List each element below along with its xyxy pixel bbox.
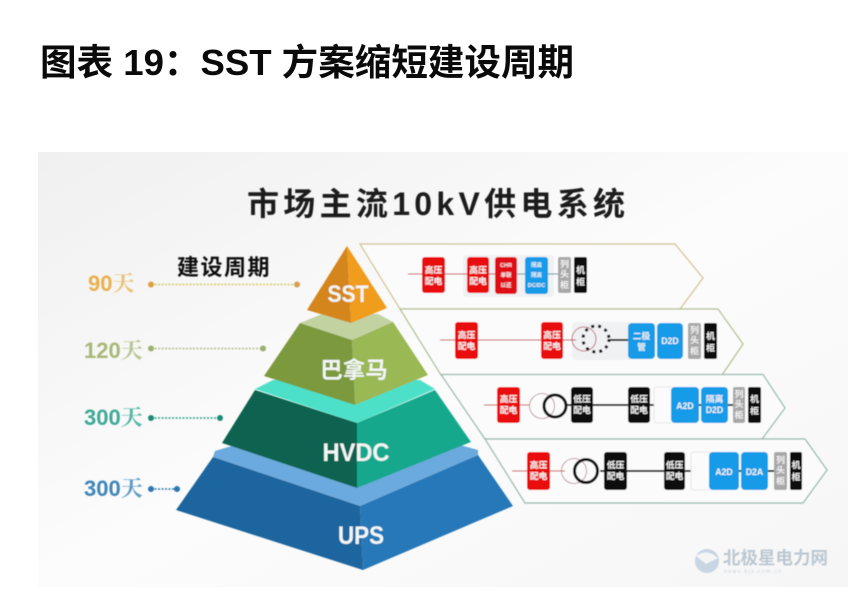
power chain: Panama: 高压 [543, 329, 561, 340]
pyramid tier: UPS [176, 445, 513, 570]
power chain: Panama: 配电 [543, 340, 561, 351]
title: 图表 19：SST 方案缩短建设周期 [40, 42, 574, 83]
watermark: news.bjx.com.cn [724, 569, 783, 575]
pyramid tier: SST [307, 246, 387, 323]
power chain: UPS: 低压 [607, 459, 624, 470]
power chain: UPS: 配电 [607, 470, 624, 481]
chevron outline row 4 [485, 439, 827, 503]
chevron outline row 2 [400, 309, 743, 375]
pyramid tier: UPS: UPS [338, 522, 384, 550]
power chain: Panama: 配电 [458, 340, 475, 351]
power chain: SST: CHR [500, 263, 512, 269]
power chain: HVDC: 机 [750, 393, 759, 404]
panel heading: 市场主流10kV供电系统 [247, 186, 629, 222]
power chain: Panama: 柜 [690, 345, 699, 356]
power chain: SST [408, 255, 587, 297]
timeline row: 90 days [88, 271, 300, 296]
power chain: HVDC: D2D [706, 405, 723, 415]
power chain: SST: 高压 [425, 264, 442, 275]
power chain: SST: 柜 [576, 276, 585, 287]
power chain: HVDC: 配电 [500, 404, 517, 415]
power chain: HVDC: 柜 [735, 409, 744, 420]
power chain: SST: 柜 [560, 279, 569, 290]
power chain: SST: 配电 [469, 275, 487, 286]
timeline row: 90 days: 90天 [88, 271, 134, 296]
power chain: UPS: 柜 [792, 471, 801, 482]
heading: construction period: 建设周期 [177, 255, 271, 280]
power chain: HVDC: 隔离 [706, 393, 723, 404]
power chain: SST: 列 [560, 258, 569, 269]
power chain: SST: 机 [576, 264, 585, 275]
power chain: UPS: 高压 [530, 459, 547, 470]
power chain: HVDC: 柜 [750, 405, 759, 416]
power chain: HVDC: 高压 [500, 393, 517, 404]
power chain: UPS [512, 452, 802, 490]
power chain: SST: 隔离 [531, 261, 542, 269]
power chain: HVDC: 低压 [573, 393, 591, 404]
power chain: SST: 高压 [469, 264, 487, 275]
timeline row: 300 days UPS: 300天 [84, 476, 143, 501]
power chain: HVDC: 配电 [573, 404, 591, 415]
power chain: HVDC: A2D [676, 401, 694, 411]
power chain: SST: 头 [560, 268, 569, 279]
power chain: UPS: D2A [746, 467, 764, 477]
power chain: SST: DC/DC [528, 283, 545, 289]
pyramid tier: SST: SST [328, 281, 369, 308]
power chain: HVDC: 列 [735, 388, 744, 399]
pyramid tier: HVDC: HVDC [322, 439, 390, 467]
power chain: UPS: 配电 [666, 470, 683, 481]
power chain: SST: 隔离 [531, 271, 542, 279]
power chain: SST: 单联 [500, 271, 512, 279]
power chain: UPS: 头 [776, 464, 785, 475]
power chain: HVDC: 低压 [630, 393, 648, 404]
chevron outline row 3 [441, 374, 785, 439]
power chain: UPS: 低压 [666, 459, 683, 470]
timeline row: 300 days HVDC [84, 405, 223, 430]
power chain: UPS: 配电 [530, 470, 547, 481]
power chain: Panama: 高压 [458, 329, 475, 340]
timeline row: 300 days HVDC: 300天 [84, 405, 143, 430]
power chain: Panama: D2D [661, 336, 679, 346]
power chain: HVDC: 配电 [630, 404, 648, 415]
power chain: UPS: 列 [776, 454, 785, 465]
timeline row: 120 days [84, 338, 266, 363]
power chain: SST: 以还 [500, 281, 512, 289]
timeline row: 300 days UPS [84, 476, 180, 501]
power chain: SST: 配电 [425, 275, 442, 286]
power chain: UPS: 机 [792, 459, 801, 470]
timeline row: 120 days: 120天 [84, 338, 143, 363]
watermark [695, 548, 828, 575]
pyramid tier: Panama: 巴拿马 [320, 357, 388, 383]
power chain: Panama: 柜 [706, 342, 715, 353]
watermark: 北极星电力网 [723, 548, 828, 568]
power chain: HVDC [484, 387, 761, 423]
pyramid tier: HVDC [222, 380, 471, 488]
power chain: UPS: 柜 [776, 475, 785, 486]
power chain: Panama: 列 [690, 324, 699, 335]
power chain: Panama: 管 [637, 341, 646, 352]
chevron outline row 1 [360, 244, 703, 309]
power chain: Panama [440, 322, 717, 360]
power chain: Panama: 机 [706, 330, 715, 341]
power chain: Panama: 头 [690, 334, 699, 345]
pyramid tier: Panama [264, 314, 428, 405]
power chain: UPS: A2D [715, 467, 733, 477]
power chain: HVDC: 头 [735, 398, 744, 409]
power chain: Panama: 二极 [633, 330, 650, 341]
